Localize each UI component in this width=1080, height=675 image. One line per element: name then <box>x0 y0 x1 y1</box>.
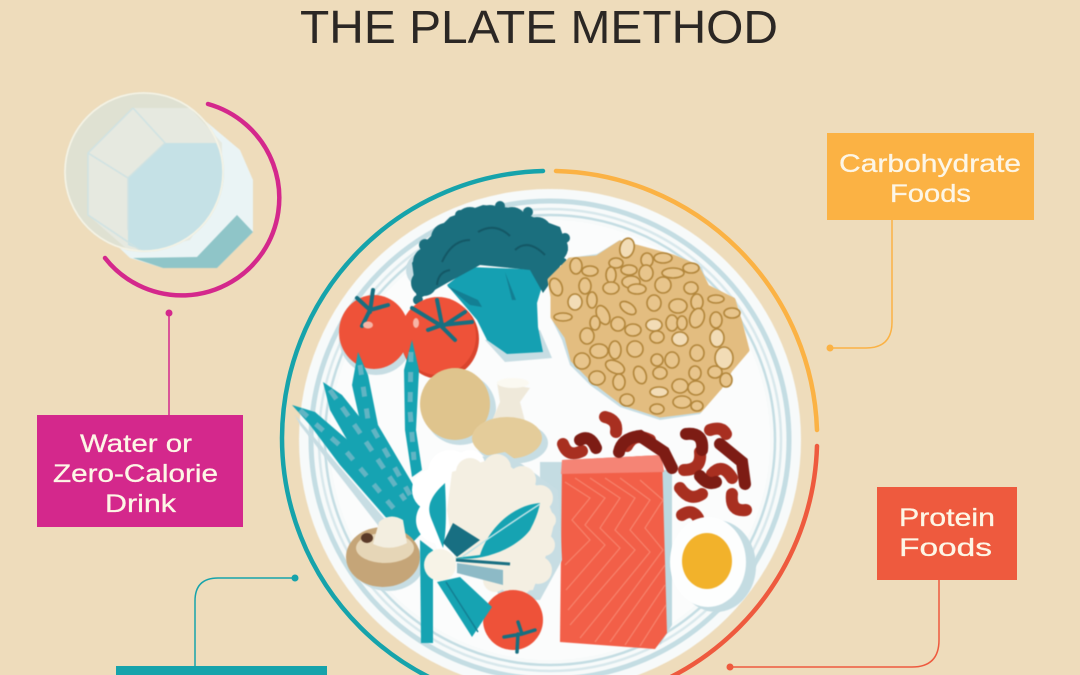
connector: vegetables <box>195 574 298 666</box>
food: lower mushroom <box>346 516 424 591</box>
food: cauliflower <box>412 450 562 600</box>
red ring arc <box>560 446 817 675</box>
label: carbohydrate foods: Carbohydrate <box>839 150 1021 178</box>
title: THE PLATE METHOD <box>300 1 778 53</box>
food: tomatoes <box>339 290 479 379</box>
food: mushroom top <box>472 378 548 464</box>
label: protein foods <box>877 487 1017 580</box>
water ring arc <box>105 104 279 295</box>
food: beans and grains <box>547 237 747 420</box>
connector: carbohydrate <box>826 220 892 352</box>
label: protein foods: Protein <box>899 504 995 532</box>
food: cauliflower leaves and stalks <box>420 483 540 643</box>
orange ring arc <box>556 171 817 430</box>
teal ring arc <box>282 171 550 675</box>
label: carbohydrate foods: Foods <box>890 180 971 208</box>
plate <box>299 189 801 675</box>
food: lower tomato <box>483 590 543 652</box>
food: asparagus <box>292 340 428 560</box>
label: water or zero-calorie drink: Zero-Calorie <box>53 460 218 488</box>
label: non-starchy vegetables (cropped box) <box>116 666 327 675</box>
label: water or zero-calorie drink: Water or <box>80 430 192 458</box>
food: salmon <box>540 455 672 649</box>
label: water or zero-calorie drink <box>37 415 243 527</box>
label: carbohydrate foods <box>827 133 1034 220</box>
icon: water glass <box>64 92 253 268</box>
connector: water <box>166 310 172 416</box>
food: broccoli <box>406 201 570 362</box>
food: boiled egg <box>670 517 756 612</box>
label: protein foods: Foods <box>899 534 992 562</box>
food: potato <box>420 368 496 445</box>
label: water or zero-calorie drink: Drink <box>105 490 177 518</box>
connector: protein <box>726 580 939 670</box>
food: kidney beans <box>563 417 746 518</box>
